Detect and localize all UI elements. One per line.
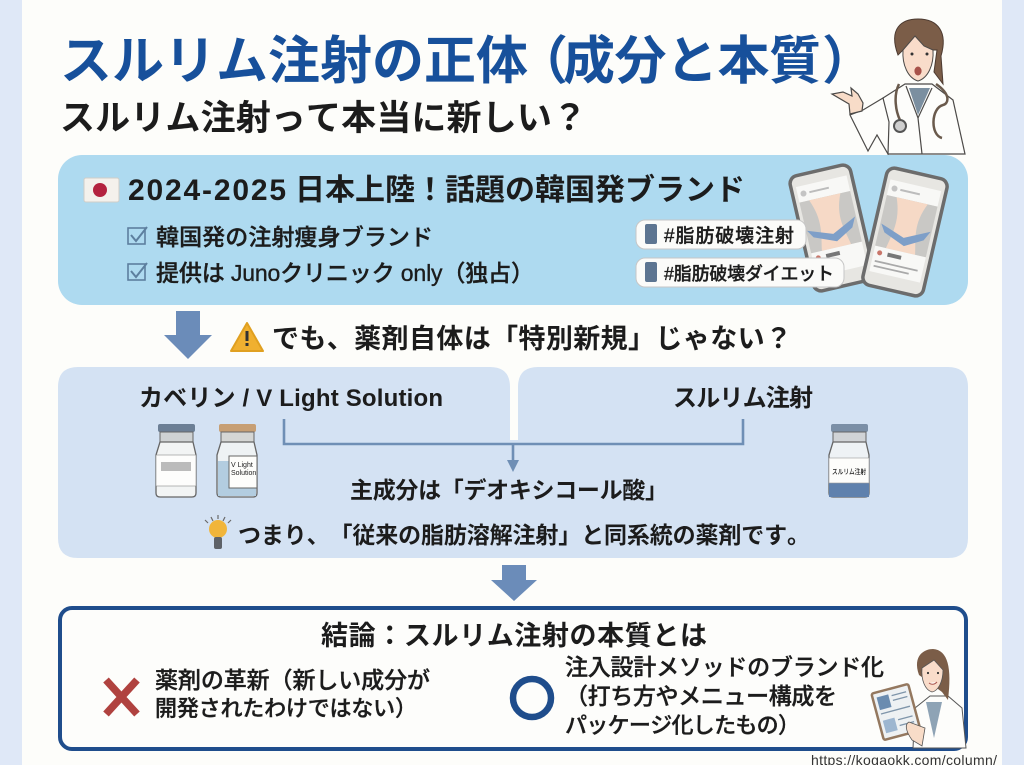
title: ） (822, 33, 874, 91)
callout: question: でも、薬剤自体は「特別新規」じゃない？ (272, 324, 792, 354)
icon: doctor presenting (832, 19, 965, 154)
subtitle: スルリム注射って本当に新しい？ (60, 99, 587, 138)
panel: conclusion (60, 608, 966, 749)
text: drug innovation: 開発されたわけではない） (155, 696, 417, 721)
panel: Korean brand (58, 155, 968, 305)
title: スルリム注射の正体 (60, 33, 528, 91)
text: method brand (565, 654, 884, 738)
panel heading: 日本上陸！話題の韓国発ブランド (295, 173, 745, 207)
panel heading: 2024-2025 (128, 174, 286, 207)
hashtag tag 2 (636, 258, 844, 287)
title: （ (516, 33, 568, 91)
icon: light bulb (205, 515, 231, 549)
icon: warning (231, 323, 263, 351)
panel: comparison (58, 367, 968, 558)
flag icon: Japan (84, 178, 119, 202)
phone left (789, 164, 875, 292)
vial: V Light (217, 424, 257, 497)
text: method brand: パッケージ化したもの） (565, 713, 800, 738)
hashtag tag 1 (636, 220, 806, 249)
connector arrow (284, 419, 743, 472)
checklist item 2: 提供は Junoクリニック only（独占） (156, 260, 534, 286)
text: method brand: （打ち方やメニュー構成を (565, 683, 837, 709)
main ingredient text: 主成分は「デオキシコール酸」 (350, 477, 668, 503)
vial label text: スルリム注射 (832, 467, 866, 476)
icon: doctor with tablet (871, 649, 966, 748)
text: method brand: 注入設計メソッドのブランド化 (565, 654, 884, 680)
conclusion heading: 結論：スルリム注射の本質とは (321, 621, 707, 651)
arrow: down 2 (491, 565, 537, 601)
icon: circle (513, 679, 551, 717)
phone right (861, 167, 949, 297)
vial: V Light: Solution (231, 470, 256, 477)
summary text: つまり、「従来の脂肪溶解注射」と同系統の薬剤です。 (238, 522, 810, 548)
title: 成分と本質 (563, 33, 821, 91)
text: drug innovation (155, 667, 430, 721)
product label: left: カベリン / V Light Solution (139, 385, 443, 412)
arrow: down 1 (164, 311, 212, 359)
vial label text: V Light (231, 462, 253, 469)
text: drug innovation: 薬剤の革新（新しい成分が (155, 667, 430, 693)
hashtag tag 1: #脂肪破壊注射 (664, 225, 794, 247)
vial: Slurim (829, 424, 869, 497)
vial: Kabelline (156, 424, 196, 497)
icon: cross (106, 680, 137, 714)
title (60, 33, 874, 91)
product label: right: スルリム注射 (673, 385, 813, 412)
checklist item 1: 韓国発の注射痩身ブランド (156, 224, 433, 250)
hashtag tag 2: #脂肪破壊ダイエット (664, 264, 834, 284)
